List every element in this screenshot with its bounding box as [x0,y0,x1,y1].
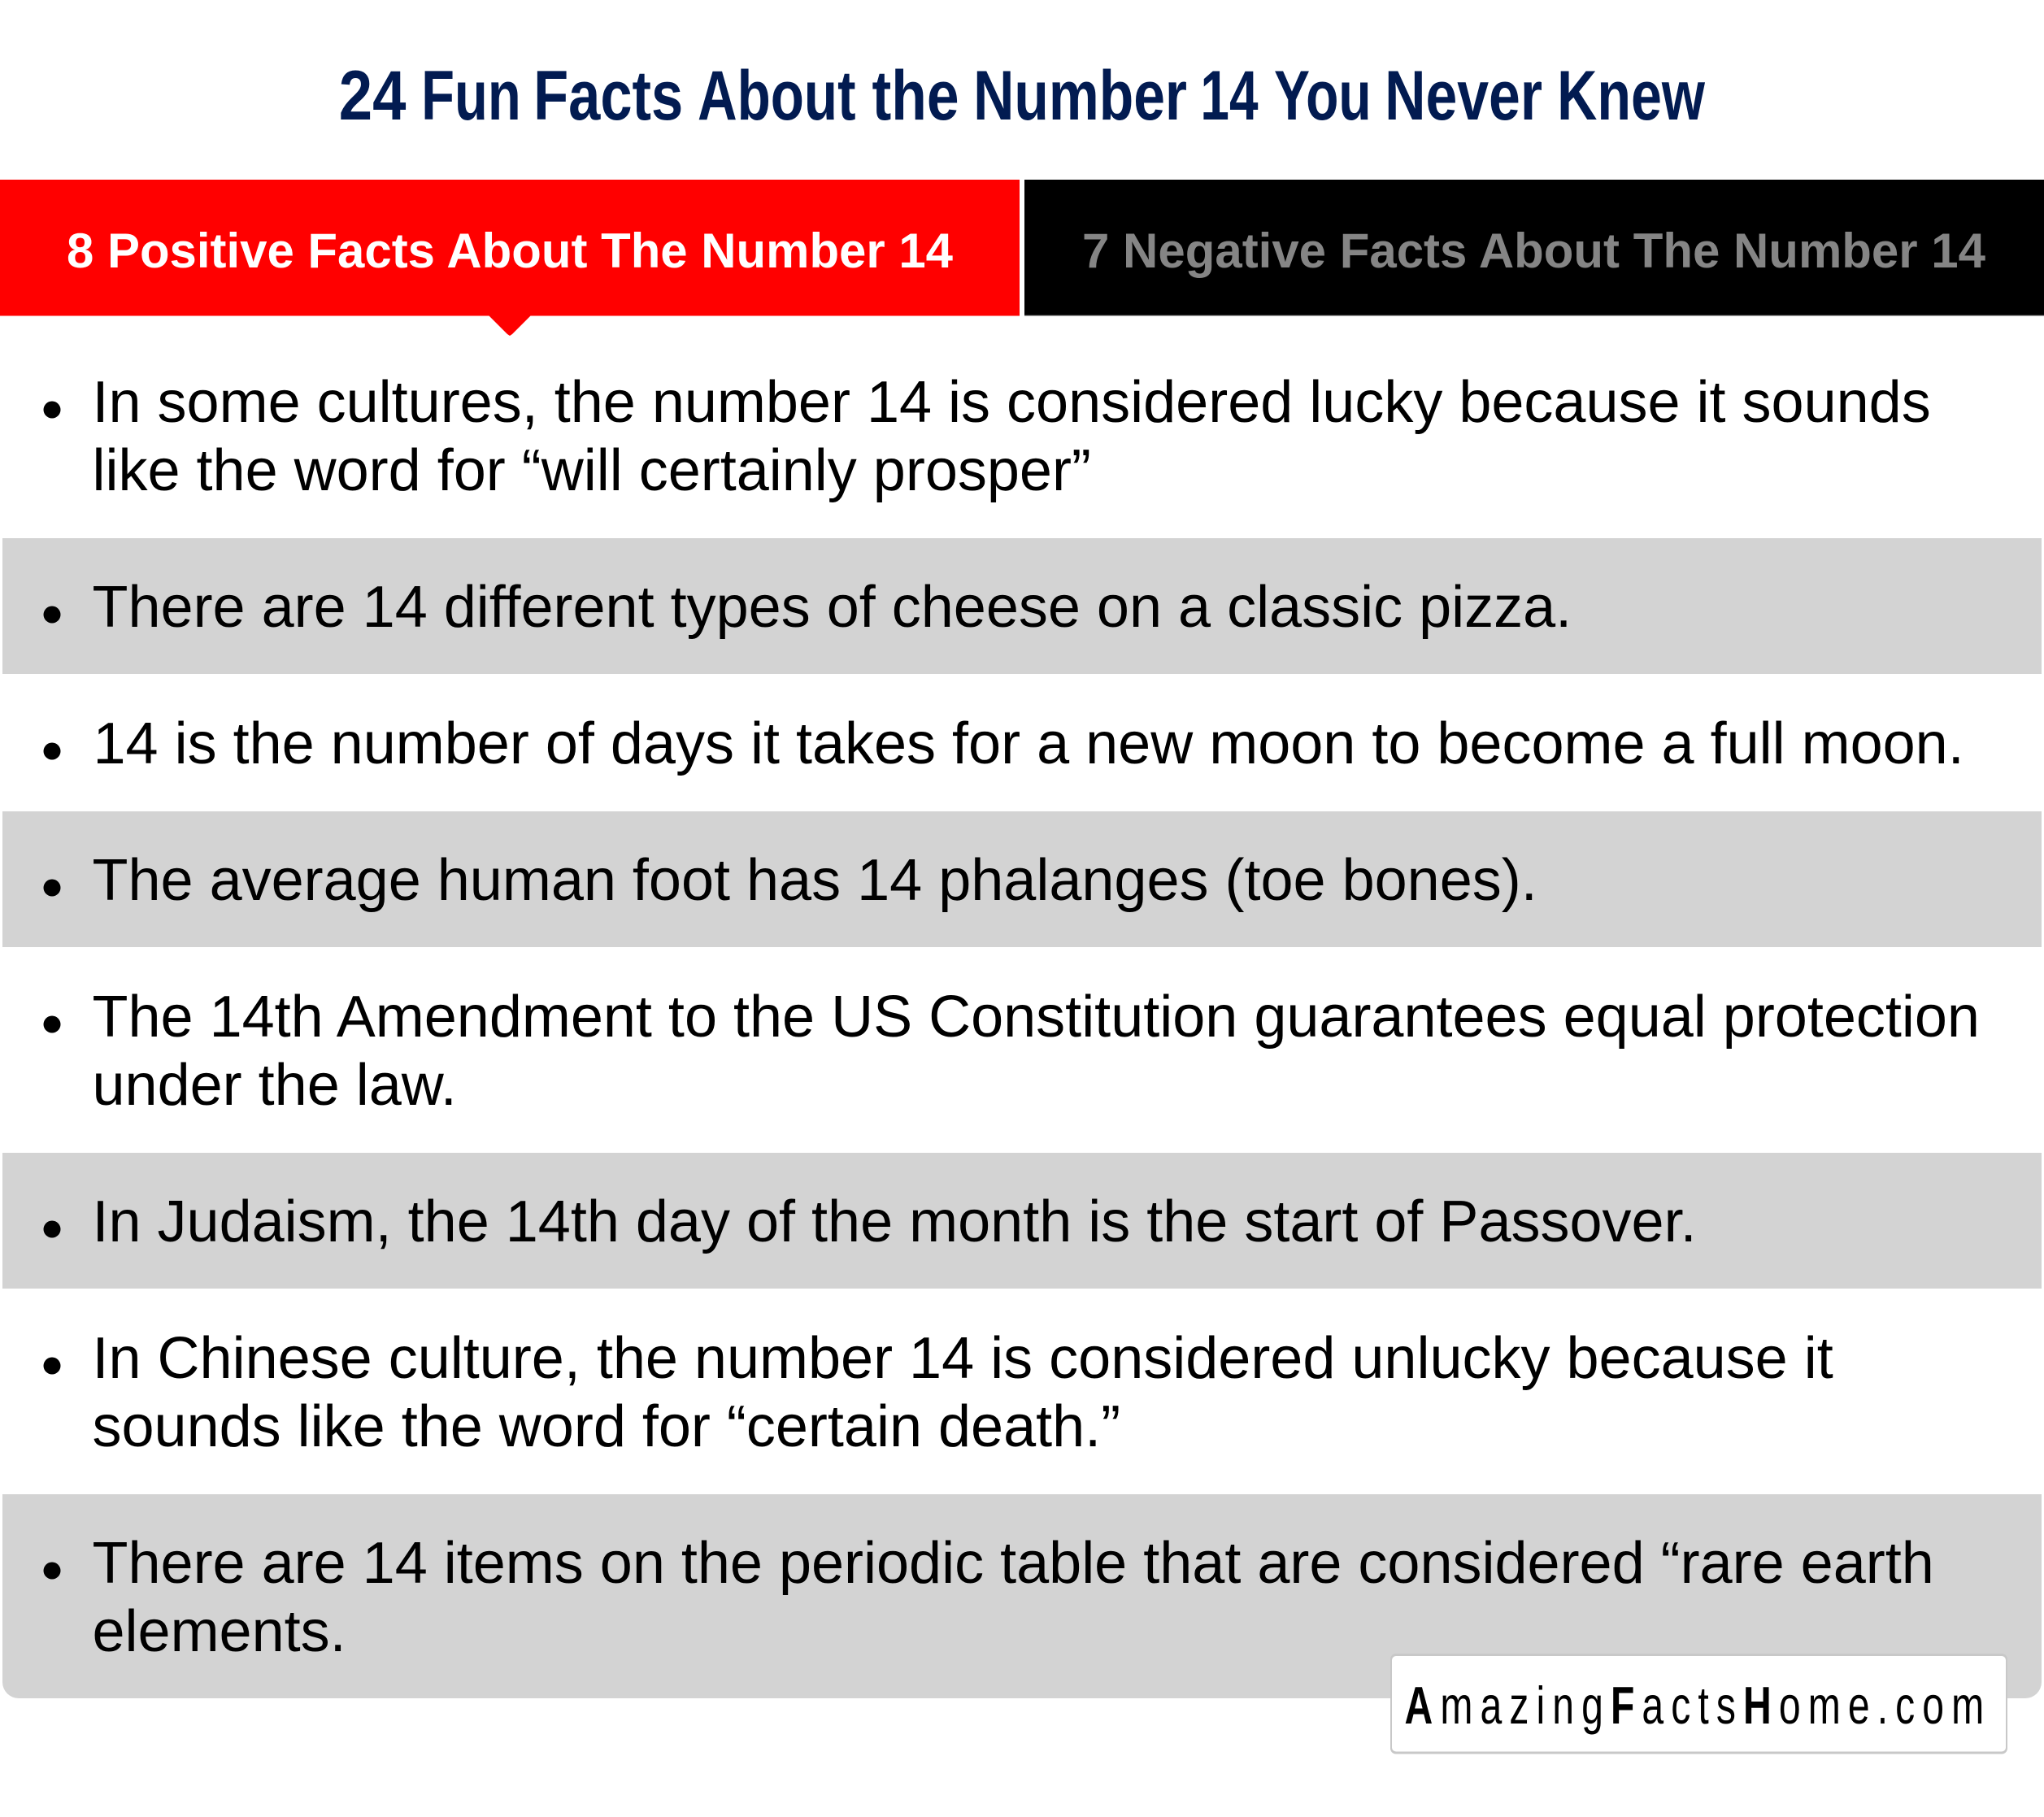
fact 4: The average human foot has 14 phalanges (toe bones). [93,848,1537,913]
fact 2 [2,538,2042,674]
fact 8: There are 14 items on the periodic table that are considered “rare earth [93,1531,1934,1596]
fact 1: In some cultures, the number 14 is considered lucky because it sounds [93,370,1931,435]
fact 7 [44,1326,1833,1459]
fact 2: There are 14 different types of cheese on a classic pizza. [93,575,1572,640]
fact 8 [2,1494,2042,1698]
title: Knew [1557,57,1706,135]
title: You [1274,57,1372,135]
fact 7: In Chinese culture, the number 14 is considered unlucky because it [93,1326,1833,1391]
title [339,57,1706,135]
title: Never [1385,57,1542,135]
title: About [698,57,855,135]
tab: positive facts (active): 8 Positive Facts About The Number 14 [67,224,954,278]
title: Facts [533,57,683,135]
fact 5 [44,985,1980,1118]
panel: list of facts [2,370,2042,1698]
fact 5: The 14th Amendment to the US Constitution guarantees equal protection [93,985,1980,1050]
fact 4 [2,811,2042,947]
tab: positive facts (active) [0,180,1020,336]
title: the [872,57,959,135]
title: Fun [421,57,521,135]
tab: negative facts (inactive) [1024,180,2044,315]
title: 14 [1200,57,1259,135]
tab: negative facts (inactive): 7 Negative Facts About The Number 14 [1082,224,1986,278]
logo: AmazingFactsHome.com [1390,1654,2007,1754]
title: 24 [339,57,407,135]
fact 1 [44,370,1931,503]
fact 3: 14 is the number of days it takes for a new moon to become a full moon. [93,711,1964,776]
fact 7: sounds like the word for “certain death.” [93,1394,1120,1459]
title: Number [973,57,1187,135]
fact 5: under the law. [93,1053,457,1118]
fact 6: In Judaism, the 14th day of the month is the start of Passover. [93,1189,1697,1254]
fact 8: elements. [93,1599,346,1664]
fact 1: like the word for “will certainly prosper” [93,438,1091,503]
logo: AmazingFactsHome.com: AmazingFactsHome.com [1405,1676,1991,1736]
fact 6 [2,1153,2042,1289]
